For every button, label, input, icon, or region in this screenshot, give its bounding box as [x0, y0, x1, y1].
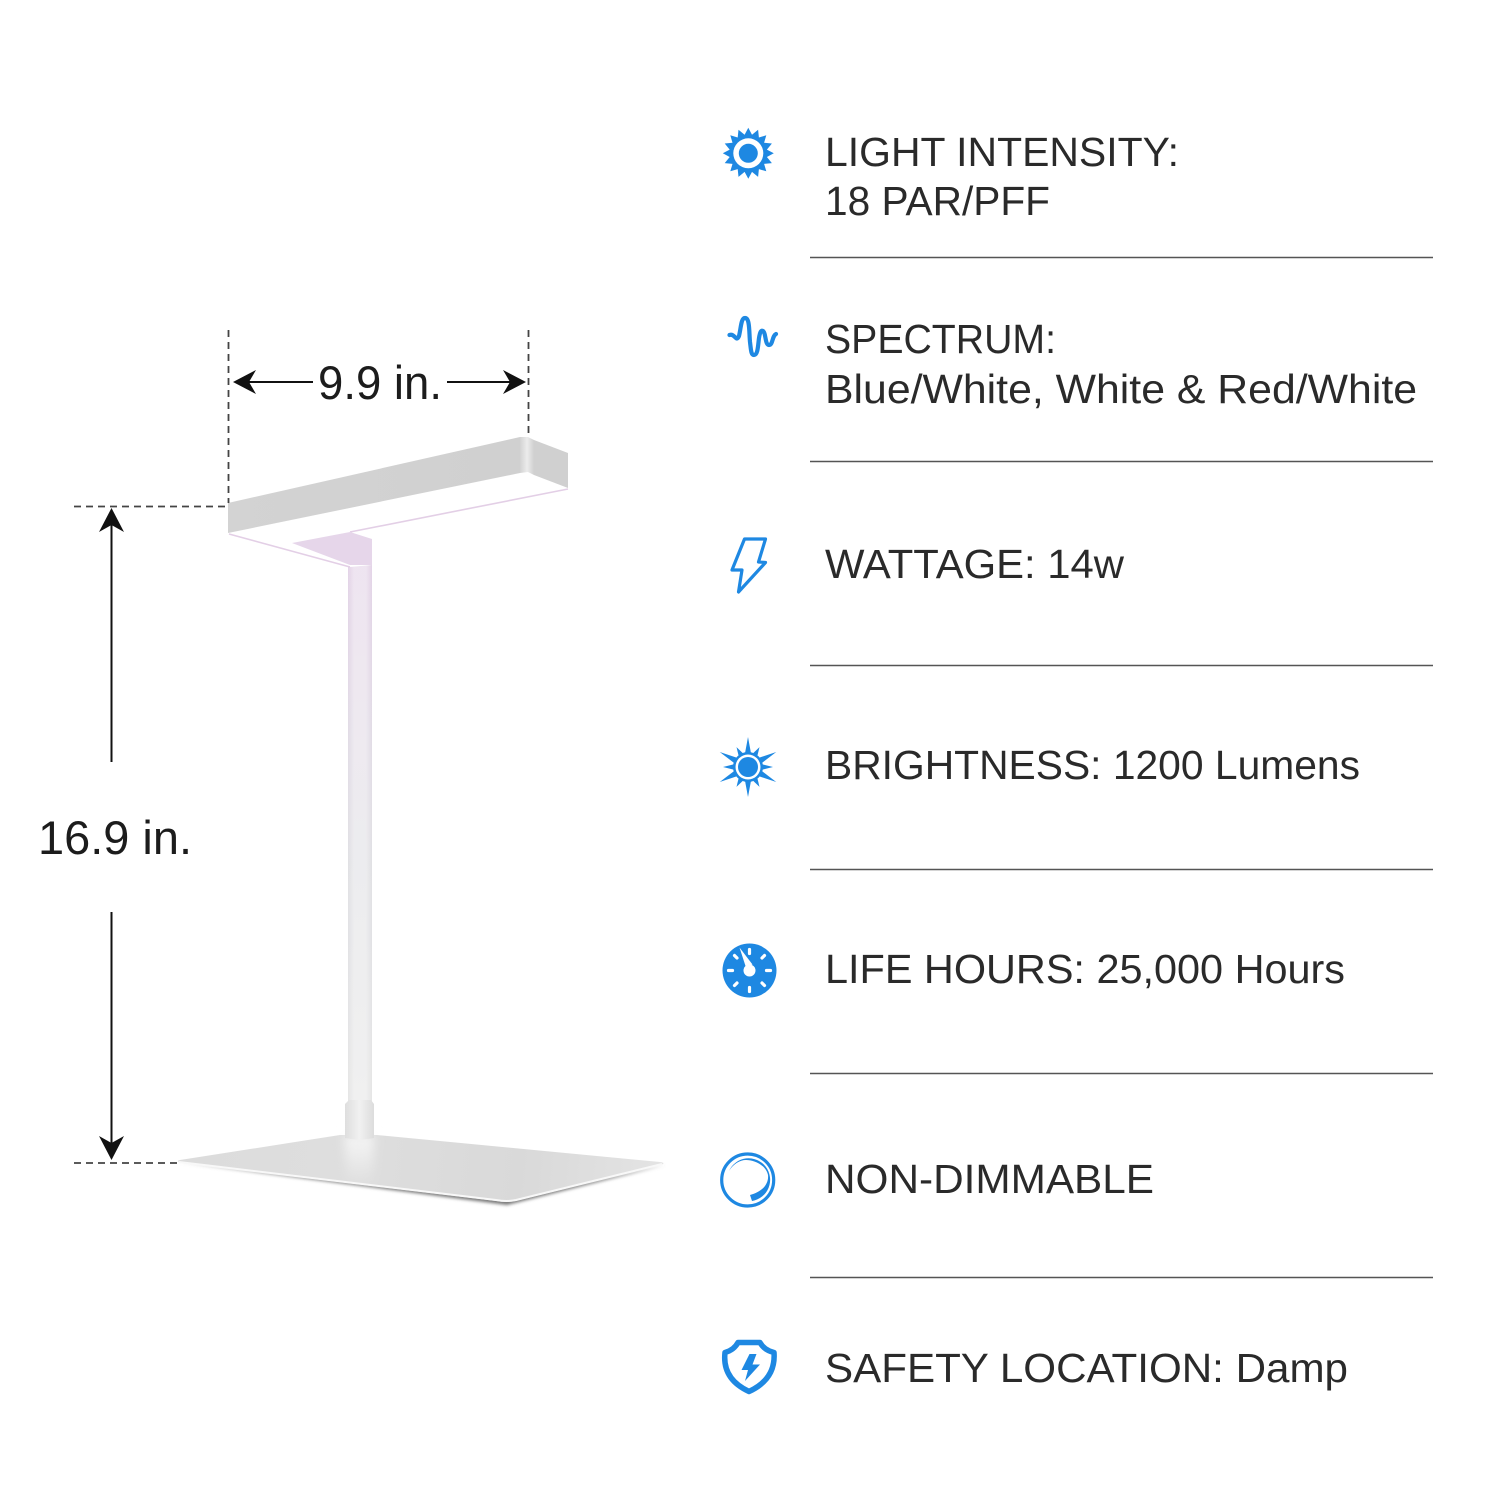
- spec: safety location: [725, 1342, 1348, 1392]
- spec: spectrum: [730, 316, 1417, 412]
- icon: sun gear: [723, 128, 774, 179]
- text: safety location: SAFETY LOCATION: Damp: [825, 1345, 1348, 1391]
- spec: brightness: [718, 737, 1360, 797]
- text: brightness: BRIGHTNESS: 1200 Lumens: [825, 742, 1360, 788]
- icon: gauge: [722, 944, 776, 998]
- spec: non-dimmable: [722, 1154, 1154, 1206]
- width dimension: [228, 330, 528, 503]
- text: wattage: WATTAGE: 14w: [825, 541, 1124, 587]
- icon: shield with bolt: [725, 1342, 774, 1392]
- text: light intensity: 18 PAR/PFF: [825, 178, 1050, 224]
- lamp head: [228, 437, 568, 567]
- icon: radiant sun: [718, 737, 778, 797]
- spec: wattage: [732, 539, 1124, 592]
- spec: light intensity: [723, 128, 1179, 224]
- icon: wave: [730, 318, 776, 355]
- lamp product illustration: [178, 437, 665, 1205]
- text: spectrum: Blue/White, White & Red/White: [825, 366, 1417, 412]
- text: non-dimmable: NON-DIMMABLE: [825, 1156, 1154, 1202]
- lamp stem collar: [345, 1100, 374, 1140]
- text: light intensity: [825, 129, 1179, 224]
- height dimension: [38, 506, 228, 1163]
- text: spectrum: SPECTRUM:: [825, 316, 1056, 362]
- icon: lightning bolt: [732, 539, 766, 592]
- spec: life hours: [722, 944, 1345, 998]
- lamp base plate: [178, 1135, 665, 1205]
- lamp stem: [348, 565, 372, 1105]
- height dimension: 16.9 in.: [38, 811, 192, 864]
- text: life hours: LIFE HOURS: 25,000 Hours: [825, 946, 1345, 992]
- width dimension: 9.9 in.: [318, 356, 442, 409]
- text: spectrum: [825, 316, 1417, 412]
- text: light intensity: LIGHT INTENSITY:: [825, 129, 1179, 175]
- icon: dial ring: [722, 1154, 774, 1206]
